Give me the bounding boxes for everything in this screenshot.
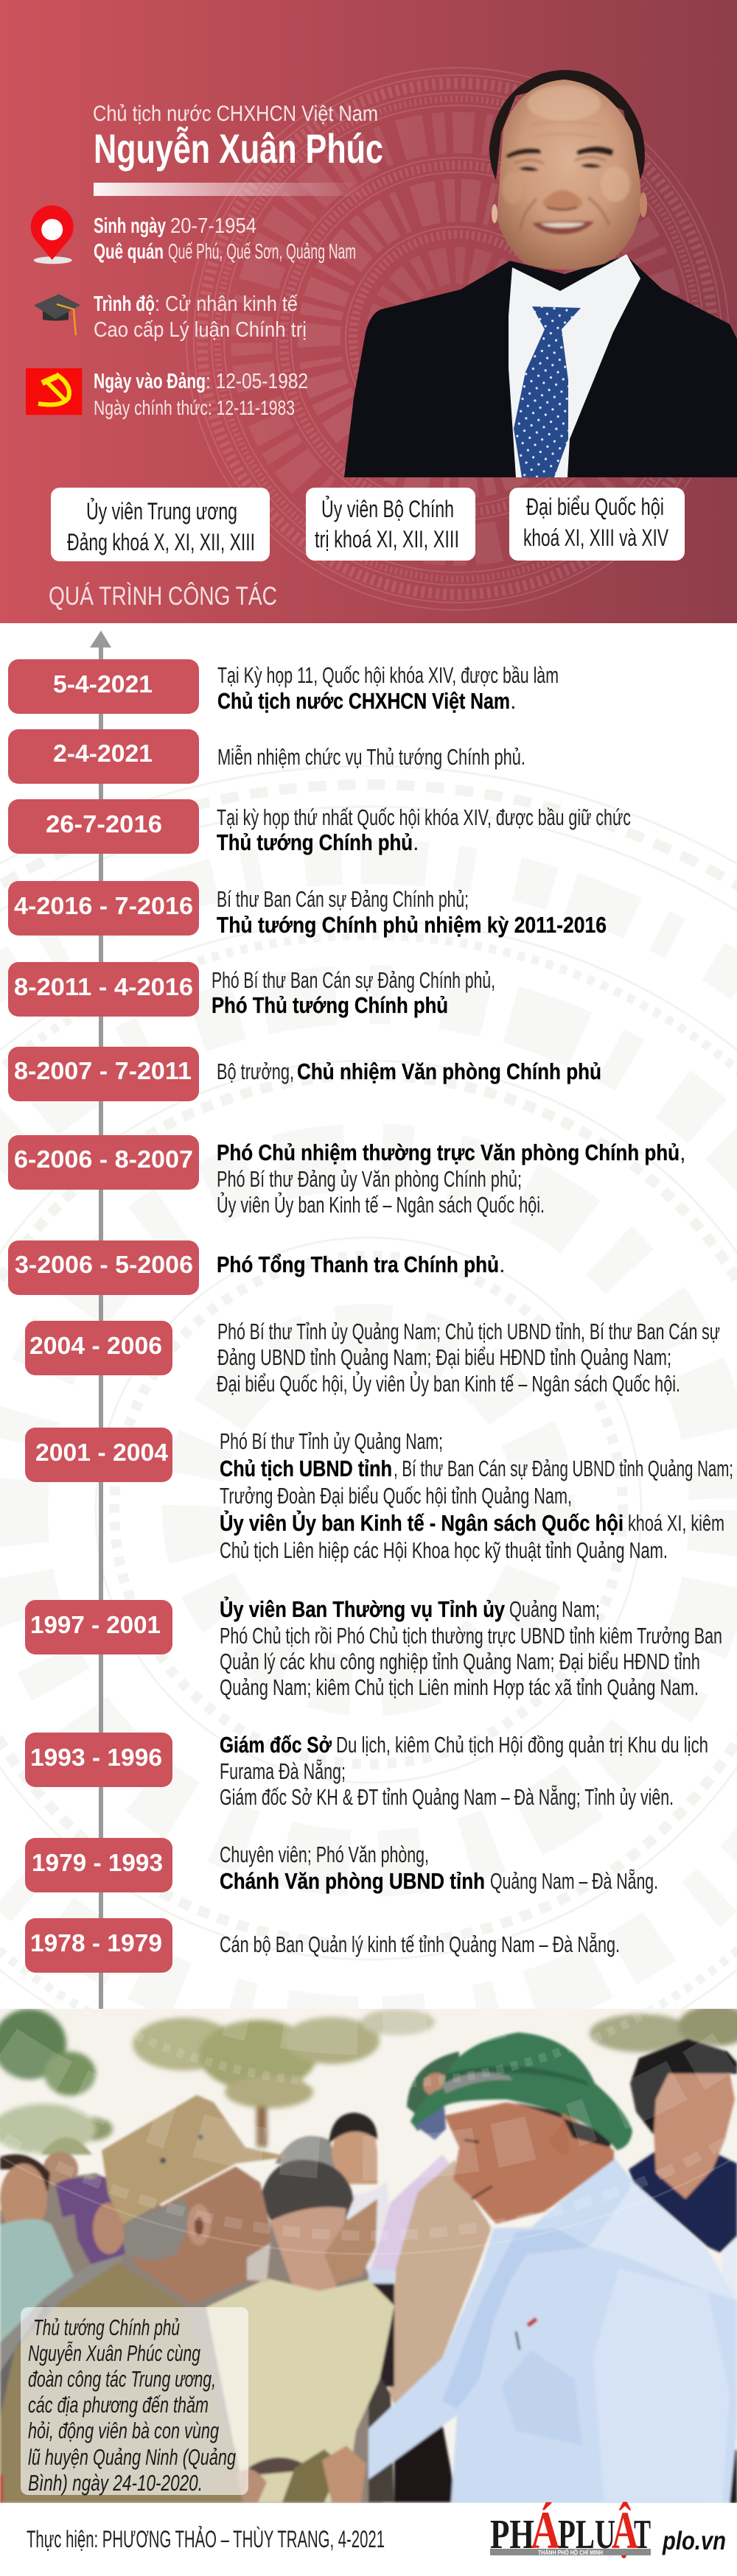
logo: Pháp Luật: PH xyxy=(490,2512,534,2558)
timeline entry: 2001 - 2004: Phó Bí thư Tỉnh ủy Quảng Nam; xyxy=(220,1428,443,1454)
timeline entry: 8-2007 - 7-2011: Bộ trưởng, xyxy=(217,1059,294,1084)
title: name: Nguyễn Xuân Phúc xyxy=(94,125,383,172)
info: party: Ngày vào Đảng xyxy=(94,370,206,393)
timeline axis arrow xyxy=(90,631,111,2009)
info: party: Ngày chính thức: 12-11-1983 xyxy=(94,396,295,419)
timeline entry: 5-4-2021: 5-4-2021 xyxy=(53,670,153,698)
timeline entry: 1979 - 1993: Chuyên viên; Phó Văn phòng, xyxy=(220,1842,429,1867)
nose xyxy=(543,190,582,209)
timeline entry: 4-2016 - 7-2016: Thủ tướng Chính phủ nhiệm kỳ 2011-2016 xyxy=(217,912,607,938)
timeline entry: 5-4-2021: Chủ tịch nước CHXHCN Việt Nam xyxy=(217,688,510,714)
timeline entry: 26-7-2016: 26-7-2016 xyxy=(46,810,162,838)
card: central committee: Ủy viên Trung ương xyxy=(86,498,237,524)
timeline entry: 1979 - 1993 xyxy=(25,1838,658,1894)
info: birth: Sinh ngày xyxy=(94,214,166,238)
man cap xyxy=(102,2095,289,2224)
header background xyxy=(0,0,737,623)
timeline entry: 2-4-2021: 2-4-2021 xyxy=(53,740,153,767)
main head xyxy=(444,2102,614,2224)
logo: Pháp Luật: THÀNH PHỐ HỒ CHÍ MINH xyxy=(538,2549,603,2556)
back helmet man xyxy=(407,2052,459,2118)
timeline entry: 8-2011 - 4-2016: Phó Bí thư Ban Cán sự Đảng Chính phủ, xyxy=(212,967,495,993)
timeline entry: 8-2011 - 4-2016: 8-2011 - 4-2016 xyxy=(14,973,193,1000)
footer credits: Thực hiện: PHƯƠNG THẢO – THÙY TRANG, 4-2021 xyxy=(27,2526,385,2552)
timeline entry: 4-2016 - 7-2016: Bí thư Ban Cán sự Đảng Chính phủ; xyxy=(217,886,469,912)
ears xyxy=(640,192,647,217)
timeline entry: 8-2011 - 4-2016: Phó Thủ tướng Chính phủ xyxy=(212,992,448,1018)
info: party: : 12-05-1982 xyxy=(206,370,308,393)
timeline entry: 1993 - 1996: Furama Đà Nẵng; xyxy=(220,1758,346,1784)
timeline entry: 3-2006 - 5-2006 xyxy=(8,1240,506,1295)
background drum pattern: timeline xyxy=(0,766,737,2254)
timeline entry: 1979 - 1993: Quảng Nam – Đà Nẵng. xyxy=(490,1868,658,1894)
info: education xyxy=(94,292,307,342)
man jacket xyxy=(0,2262,245,2503)
timeline entry: 1979 - 1993: 1979 - 1993 xyxy=(32,1849,163,1876)
callout: photo caption: Thủ tướng Chính phủ xyxy=(33,2314,180,2340)
timeline entry: 6-2006 - 8-2007 xyxy=(8,1135,686,1218)
right man xyxy=(629,2151,737,2253)
shirt xyxy=(509,254,640,477)
timeline entry: 6-2006 - 8-2007: Ủy viên Ủy ban Kinh tế – Ngân sách Quốc hội. xyxy=(217,1191,545,1218)
photo: visiting flood victims xyxy=(0,766,737,2505)
callout: photo caption: các địa phương đến thăm xyxy=(28,2392,209,2418)
logo: plo.vn: plo.vn xyxy=(662,2527,726,2555)
woman xyxy=(260,2160,354,2225)
cheeks xyxy=(601,166,630,202)
card: national assembly: Đại biểu Quốc hội xyxy=(526,494,664,520)
title small: Chủ tịch nước CHXHCN Việt Nam xyxy=(93,102,378,126)
icon: graduation cap xyxy=(34,294,80,335)
hair xyxy=(489,70,645,184)
features xyxy=(502,85,630,234)
forehead lines xyxy=(556,133,588,136)
timeline entry: 1997 - 2001: 1997 - 2001 xyxy=(30,1611,161,1638)
title underline xyxy=(94,183,368,196)
photo trees xyxy=(0,2005,737,2154)
callout: photo caption xyxy=(21,2307,248,2496)
info: birth: Quê quán xyxy=(94,240,164,264)
logo: Pháp Luật: T xyxy=(634,2512,651,2558)
card: politburo: Ủy viên Bộ Chính xyxy=(321,496,454,522)
timeline entry: 3-2006 - 5-2006: 3-2006 - 5-2006 xyxy=(15,1251,193,1278)
eyes xyxy=(519,164,601,171)
timeline entry: 3-2006 - 5-2006: . xyxy=(499,1252,506,1277)
timeline entry: 8-2007 - 7-2011 xyxy=(8,1047,601,1101)
crowd base xyxy=(0,2173,383,2503)
section heading: QUÁ TRÌNH CÔNG TÁC xyxy=(49,582,277,611)
timeline entry: 5-4-2021: . xyxy=(510,688,517,714)
icon: location pin xyxy=(31,206,74,264)
card: central committee: Đảng khoá X, XI, XII, XIII xyxy=(67,529,255,555)
photo pattern overlay xyxy=(0,766,737,2254)
callout: photo caption: hỏi, động viên bà con vùng xyxy=(28,2418,219,2443)
timeline entry: 1978 - 1979 xyxy=(25,1918,620,1973)
logo: Pháp Luật: PLU xyxy=(558,2512,615,2558)
timeline entry: 4-2016 - 7-2016 xyxy=(8,881,607,938)
callout: photo caption: Bình) ngày 24-10-2020. xyxy=(28,2470,203,2496)
timeline entry: 6-2006 - 8-2007: Phó Bí thư Đảng ủy Văn phòng Chính phủ; xyxy=(217,1166,522,1192)
info: birth: Quế Phú, Quế Sơn, Quảng Nam xyxy=(168,240,356,264)
icon: party flag xyxy=(26,368,82,415)
timeline entry: 2-4-2021 xyxy=(8,729,525,784)
photo sky xyxy=(0,2009,737,2503)
drum pattern xyxy=(186,68,729,610)
timeline entry: 2001 - 2004: Trưởng Đoàn Đại biểu Quốc hội tỉnh Quảng Nam, xyxy=(220,1483,572,1509)
callout: photo caption: đoàn công tác Trung ương, xyxy=(28,2366,216,2392)
suit xyxy=(344,256,737,477)
timeline entry: 2001 - 2004: Ủy viên Ủy ban Kinh tế - Ngân sách Quốc hội xyxy=(220,1509,624,1536)
main shirt xyxy=(368,2157,737,2503)
brows xyxy=(506,147,613,158)
beige shirt xyxy=(388,2160,492,2431)
head xyxy=(489,70,647,270)
face xyxy=(497,80,642,270)
timeline entry: 2-4-2021: Miễn nhiệm chức vụ Thủ tướng Chính phủ. xyxy=(217,744,525,770)
info: party xyxy=(94,370,308,419)
tie xyxy=(514,306,581,477)
lilac shirt xyxy=(371,2155,455,2273)
timeline entry: 2001 - 2004 xyxy=(25,1428,733,1563)
info: birth: 20-7-1954 xyxy=(170,214,256,238)
photo people xyxy=(0,2032,737,2505)
timeline entry: 3-2006 - 5-2006: Phó Tổng Thanh tra Chính phủ xyxy=(217,1252,499,1277)
info: education: Cao cấp Lý luận Chính trị xyxy=(94,318,307,342)
timeline entry: 26-7-2016 xyxy=(8,799,631,855)
helmet xyxy=(411,2032,632,2150)
info: education: : Cử nhân kinh tế xyxy=(155,292,298,316)
mouth xyxy=(532,221,594,234)
smile folds xyxy=(520,197,609,230)
callout: photo caption: Nguyễn Xuân Phúc cùng xyxy=(28,2340,200,2366)
timeline entry: 8-2011 - 4-2016 xyxy=(8,962,495,1018)
hands and cane xyxy=(248,2457,304,2475)
timeline entry: 6-2006 - 8-2007: 6-2006 - 8-2007 xyxy=(14,1145,193,1173)
info: education: Trình độ xyxy=(94,292,155,316)
timeline entry: 1997 - 2001: Quảng Nam; xyxy=(509,1596,600,1622)
timeline entry: 1993 - 1996 xyxy=(25,1732,708,1810)
logo: Pháp Luật: Ậ xyxy=(612,2501,638,2560)
timeline entry: 1993 - 1996: 1993 - 1996 xyxy=(30,1744,162,1771)
card: national assembly xyxy=(509,488,685,561)
info: birth xyxy=(94,214,356,264)
card: politburo xyxy=(306,488,475,561)
card: national assembly: khoá XI, XIII và XIV xyxy=(523,524,668,551)
timeline entry: 1997 - 2001 xyxy=(25,1596,722,1700)
timeline entry: 2001 - 2004: Chủ tịch UBND tỉnh xyxy=(220,1456,392,1481)
timeline entry: 8-2007 - 7-2011: 8-2007 - 7-2011 xyxy=(14,1057,192,1084)
timeline entry: 4-2016 - 7-2016: 4-2016 - 7-2016 xyxy=(14,892,193,919)
timeline entry: 2004 - 2006: 2004 - 2006 xyxy=(29,1332,162,1359)
timeline entry: 5-4-2021 xyxy=(8,659,559,714)
timeline entry: 5-4-2021: Tại Kỳ họp 11, Quốc hội khóa XIV, được bầu làm xyxy=(217,662,559,688)
timeline entry: 8-2007 - 7-2011: Chủ nhiệm Văn phòng Chính phủ xyxy=(297,1059,601,1084)
timeline entry: 1978 - 1979: 1978 - 1979 xyxy=(30,1929,162,1956)
portrait xyxy=(344,70,737,477)
timeline entry: 26-7-2016: . xyxy=(413,829,419,855)
background figures xyxy=(41,2138,92,2155)
timeline entry: 1997 - 2001: Ủy viên Ban Thường vụ Tỉnh ủy xyxy=(220,1596,506,1622)
panel: header xyxy=(0,0,737,623)
timeline entry: 2001 - 2004: 2001 - 2004 xyxy=(35,1439,169,1466)
man head xyxy=(123,2166,270,2304)
timeline entry: 1993 - 1996: Giám đốc Sở xyxy=(220,1732,332,1758)
timeline entry: 2004 - 2006 xyxy=(25,1319,720,1397)
logo: Pháp Luật xyxy=(490,2501,651,2560)
logo: Pháp Luật: Á xyxy=(531,2501,560,2560)
card: politburo: trị khoá XI, XII, XIII xyxy=(315,526,459,552)
callout: photo caption: lũ huyện Quảng Ninh (Quảng xyxy=(28,2444,236,2470)
card: central committee xyxy=(51,488,270,561)
timeline entry: 26-7-2016: Thủ tướng Chính phủ xyxy=(217,829,413,855)
timeline entry: 1979 - 1993: Chánh Văn phòng UBND tỉnh xyxy=(220,1868,485,1894)
timeline entry: 6-2006 - 8-2007: , xyxy=(680,1140,686,1165)
